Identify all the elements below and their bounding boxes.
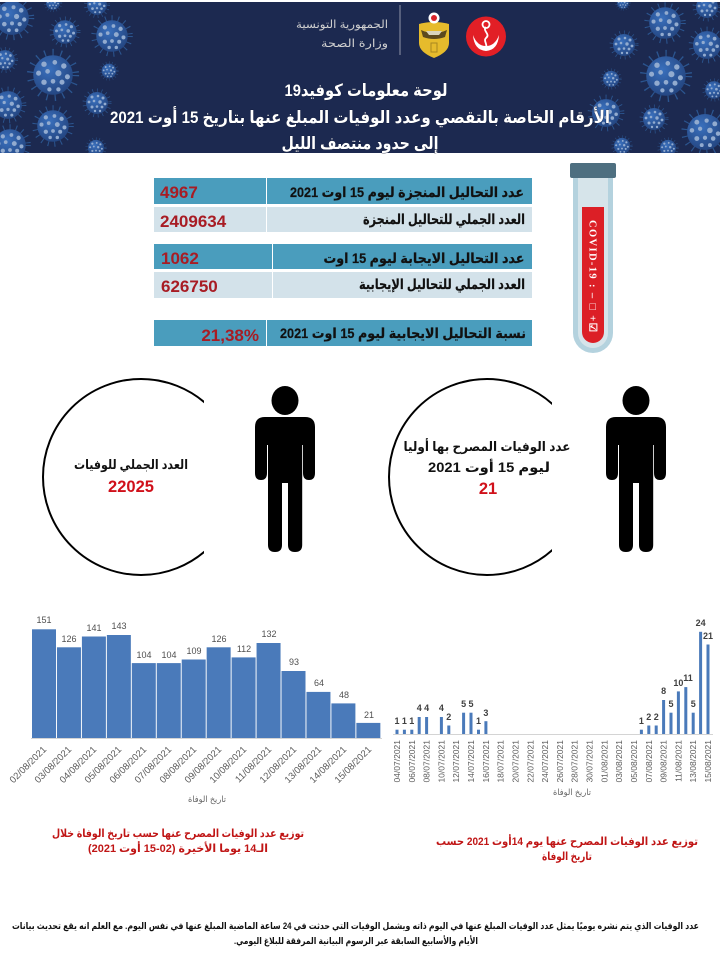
chart: deaths by date of death: 22/07/2021 xyxy=(525,740,535,783)
chart: deaths by date of death: 14/07/2021 xyxy=(466,740,476,783)
chart: deaths by date of death: 09/08/2021 xyxy=(659,740,669,783)
chart: deaths over last 14 days: تاريخ الوفاة xyxy=(188,794,227,804)
title: الأرقام الخاصة بالتقصي وعدد الوفيات المبلغ عنها بتاريخ 15 أوت 2021 xyxy=(110,106,610,128)
chart: deaths by date of death: 8 xyxy=(661,686,666,696)
icon: test tube: COVID-19 : – □ +☑ xyxy=(586,220,598,333)
chart: deaths by date of death: 30/07/2021 xyxy=(584,740,594,783)
row: positive today xyxy=(154,244,532,269)
chart: deaths by date of death: 15/08/2021 xyxy=(703,740,713,783)
chart: deaths over last 14 days: 15/08/2021 xyxy=(333,744,374,786)
chart: deaths over last 14 days: 02/08/2021 xyxy=(8,744,49,786)
chart: deaths over last 14 days: 21 xyxy=(364,710,374,720)
panel: deaths declared today: ليوم 15 أوت 2021 xyxy=(428,459,550,476)
chart: deaths by date of death: 21 xyxy=(703,631,713,641)
panel: deaths declared today xyxy=(389,379,666,575)
chart: deaths by date of death: تاريخ الوفاة xyxy=(553,787,592,797)
chart: deaths over last 14 days: 10/08/2021 xyxy=(208,744,249,786)
icon: test tube xyxy=(570,163,616,353)
row: tests today xyxy=(154,178,532,204)
chart: deaths over last 14 days: 112 xyxy=(237,644,251,654)
chart: deaths over last 14 days: 12/08/2021 xyxy=(258,744,299,786)
chart: deaths over last 14 days: 64 xyxy=(314,678,324,688)
panel: total deaths xyxy=(43,379,315,575)
chart: deaths by date of death: 5 xyxy=(691,699,696,709)
row: positivity rate: 21,38% xyxy=(201,326,259,345)
chart: deaths by date of death: 4 xyxy=(439,703,444,713)
chart: deaths by date of death: 24/07/2021 xyxy=(540,740,550,783)
row: total tests: 2409634 xyxy=(160,212,227,231)
chart: deaths by date of death: 5 xyxy=(668,699,674,709)
chart: deaths by date of death: 5 xyxy=(461,699,466,709)
chart: deaths by date of death: 16/07/2021 xyxy=(481,740,491,783)
icon: person xyxy=(606,386,666,552)
chart: deaths by date of death: 4 xyxy=(424,703,429,713)
row: tests today: عدد التحاليل المنجزة ليوم 15 اوت 2021 xyxy=(290,184,524,201)
chart: deaths by date of death: 18/07/2021 xyxy=(496,740,506,783)
chart: deaths over last 14 days: 03/08/2021 xyxy=(33,744,74,786)
chart: deaths over last 14 days: 132 xyxy=(261,629,277,639)
chart: deaths over last 14 days: 09/08/2021 xyxy=(183,744,224,786)
caption: left chart xyxy=(52,828,304,855)
chart: deaths by date of death: 12/07/2021 xyxy=(451,740,461,783)
caption: right chart: توزيع عدد الوفيات المصرح عنها يوم 14أوت 2021 حسب xyxy=(436,834,698,848)
chart: deaths by date of death: 1 xyxy=(409,716,414,726)
title: إلى حدود منتصف الليل xyxy=(282,134,438,154)
chart: deaths over last 14 days: 104 xyxy=(136,650,152,660)
chart: deaths over last 14 days: 07/08/2021 xyxy=(133,744,174,786)
chart: deaths over last 14 days: 04/08/2021 xyxy=(58,744,99,786)
chart: deaths by date of death: 10 xyxy=(673,678,683,688)
chart: deaths over last 14 days: 13/08/2021 xyxy=(283,744,324,786)
row: total positive xyxy=(154,272,532,298)
chart: deaths over last 14 days: 08/08/2021 xyxy=(158,744,199,786)
caption: left chart: توزيع عدد الوفيات المصرح عنها حسب تاريخ الوفاة خلال xyxy=(52,828,304,840)
chart: deaths over last 14 days: 141 xyxy=(86,623,102,633)
header banner xyxy=(0,0,720,163)
chart: deaths over last 14 days: 151 xyxy=(36,615,52,625)
chart: deaths by date of death: 24 xyxy=(696,618,706,628)
chart: deaths by date of death: 1 xyxy=(639,716,644,726)
footnote: الأيام والأسابيع السابقة عبر الرسوم البيانية المرفقة للبلاغ اليومي. xyxy=(234,935,478,947)
chart: deaths over last 14 days: 93 xyxy=(289,657,299,667)
chart: deaths by date of death: 2 xyxy=(446,712,451,722)
panel: deaths declared today: 21 xyxy=(479,480,497,498)
chart: deaths by date of death: 26/07/2021 xyxy=(555,740,565,783)
row: total tests: العدد الجملي للتحاليل المنجزة xyxy=(363,211,525,228)
chart: deaths by date of death: 2 xyxy=(654,712,659,722)
chart: deaths by date of death: 1 xyxy=(402,716,407,726)
panel: total deaths: العدد الجملي للوفيات xyxy=(74,457,188,472)
icon: national emblem xyxy=(419,12,449,58)
chart: deaths by date of death: 2 xyxy=(646,712,651,722)
title xyxy=(110,81,610,154)
chart: deaths over last 14 days: 109 xyxy=(186,646,202,656)
caption: left chart: الـ14 يوما الأخيرة (02-15 أوت 2021) xyxy=(88,841,268,855)
chart: deaths over last 14 days: 126 xyxy=(61,634,77,644)
chart: deaths by date of death xyxy=(392,618,713,797)
caption: right chart: تاريخ الوفاة xyxy=(542,851,592,863)
chart: deaths over last 14 days: 11/08/2021 xyxy=(233,744,274,785)
chart: deaths by date of death: 1 xyxy=(476,716,481,726)
row: positivity rate xyxy=(154,320,532,346)
chart: deaths over last 14 days: 143 xyxy=(111,621,127,631)
chart: deaths by date of death: 07/08/2021 xyxy=(644,740,654,783)
row: tests today: 4967 xyxy=(160,183,198,202)
chart: deaths by date of death: 05/08/2021 xyxy=(629,740,639,783)
chart: deaths by date of death: 28/07/2021 xyxy=(570,740,580,783)
ministry name: وزارة الصحة xyxy=(321,38,388,50)
chart: deaths by date of death: 11 xyxy=(683,673,693,683)
row: total positive: العدد الجملي للتحاليل الإيجابية xyxy=(359,276,525,293)
chart: deaths over last 14 days: 14/08/2021 xyxy=(308,744,349,786)
chart: deaths by date of death: 20/07/2021 xyxy=(510,740,520,783)
row: positivity rate: نسبة التحاليل الايجابية ليوم 15 اوت 2021 xyxy=(280,325,526,342)
row: total positive: 626750 xyxy=(161,277,218,296)
title: لوحة معلومات كوفيد19 xyxy=(284,81,448,101)
ministry name xyxy=(296,19,388,50)
chart: deaths by date of death: 13/08/2021 xyxy=(688,740,698,783)
row: positive today: 1062 xyxy=(161,249,199,268)
row: total tests xyxy=(154,207,532,232)
chart: deaths by date of death: 11/08/2021 xyxy=(673,740,683,782)
row: positive today: عدد التحاليل الايجابة ليوم 15 اوت xyxy=(324,250,524,267)
panel: tests table xyxy=(154,178,532,346)
footnote xyxy=(12,921,699,947)
chart: deaths by date of death: 1 xyxy=(394,716,400,726)
chart: deaths by date of death: 01/08/2021 xyxy=(599,740,609,783)
chart: deaths by date of death: 03/08/2021 xyxy=(614,740,624,783)
chart: deaths by date of death: 08/07/2021 xyxy=(422,740,432,783)
panel: total deaths: 22025 xyxy=(108,478,154,496)
chart: deaths by date of death: 4 xyxy=(417,703,422,713)
chart: deaths over last 14 days: 104 xyxy=(161,650,177,660)
panel: deaths declared today: عدد الوفيات المصرح بها أوليا xyxy=(404,438,570,454)
chart: deaths over last 14 days: 48 xyxy=(339,690,349,700)
chart: deaths by date of death: 5 xyxy=(468,699,474,709)
chart: deaths by date of death: 04/07/2021 xyxy=(392,740,402,783)
icon: health ministry logo xyxy=(466,16,506,56)
ministry name: الجمهورية التونسية xyxy=(296,19,388,31)
chart: deaths over last 14 days: 06/08/2021 xyxy=(108,744,149,786)
caption: right chart xyxy=(436,834,698,863)
circle outline xyxy=(42,378,204,576)
chart: deaths over last 14 days: 126 xyxy=(211,634,227,644)
chart: deaths over last 14 days: 05/08/2021 xyxy=(83,744,124,786)
circle outline xyxy=(388,378,552,576)
chart: deaths over last 14 days xyxy=(8,615,382,804)
chart: deaths by date of death: 3 xyxy=(483,708,488,718)
chart: deaths by date of death: 10/07/2021 xyxy=(436,740,446,783)
icon: person xyxy=(255,386,315,552)
chart: deaths by date of death: 06/07/2021 xyxy=(407,740,417,783)
